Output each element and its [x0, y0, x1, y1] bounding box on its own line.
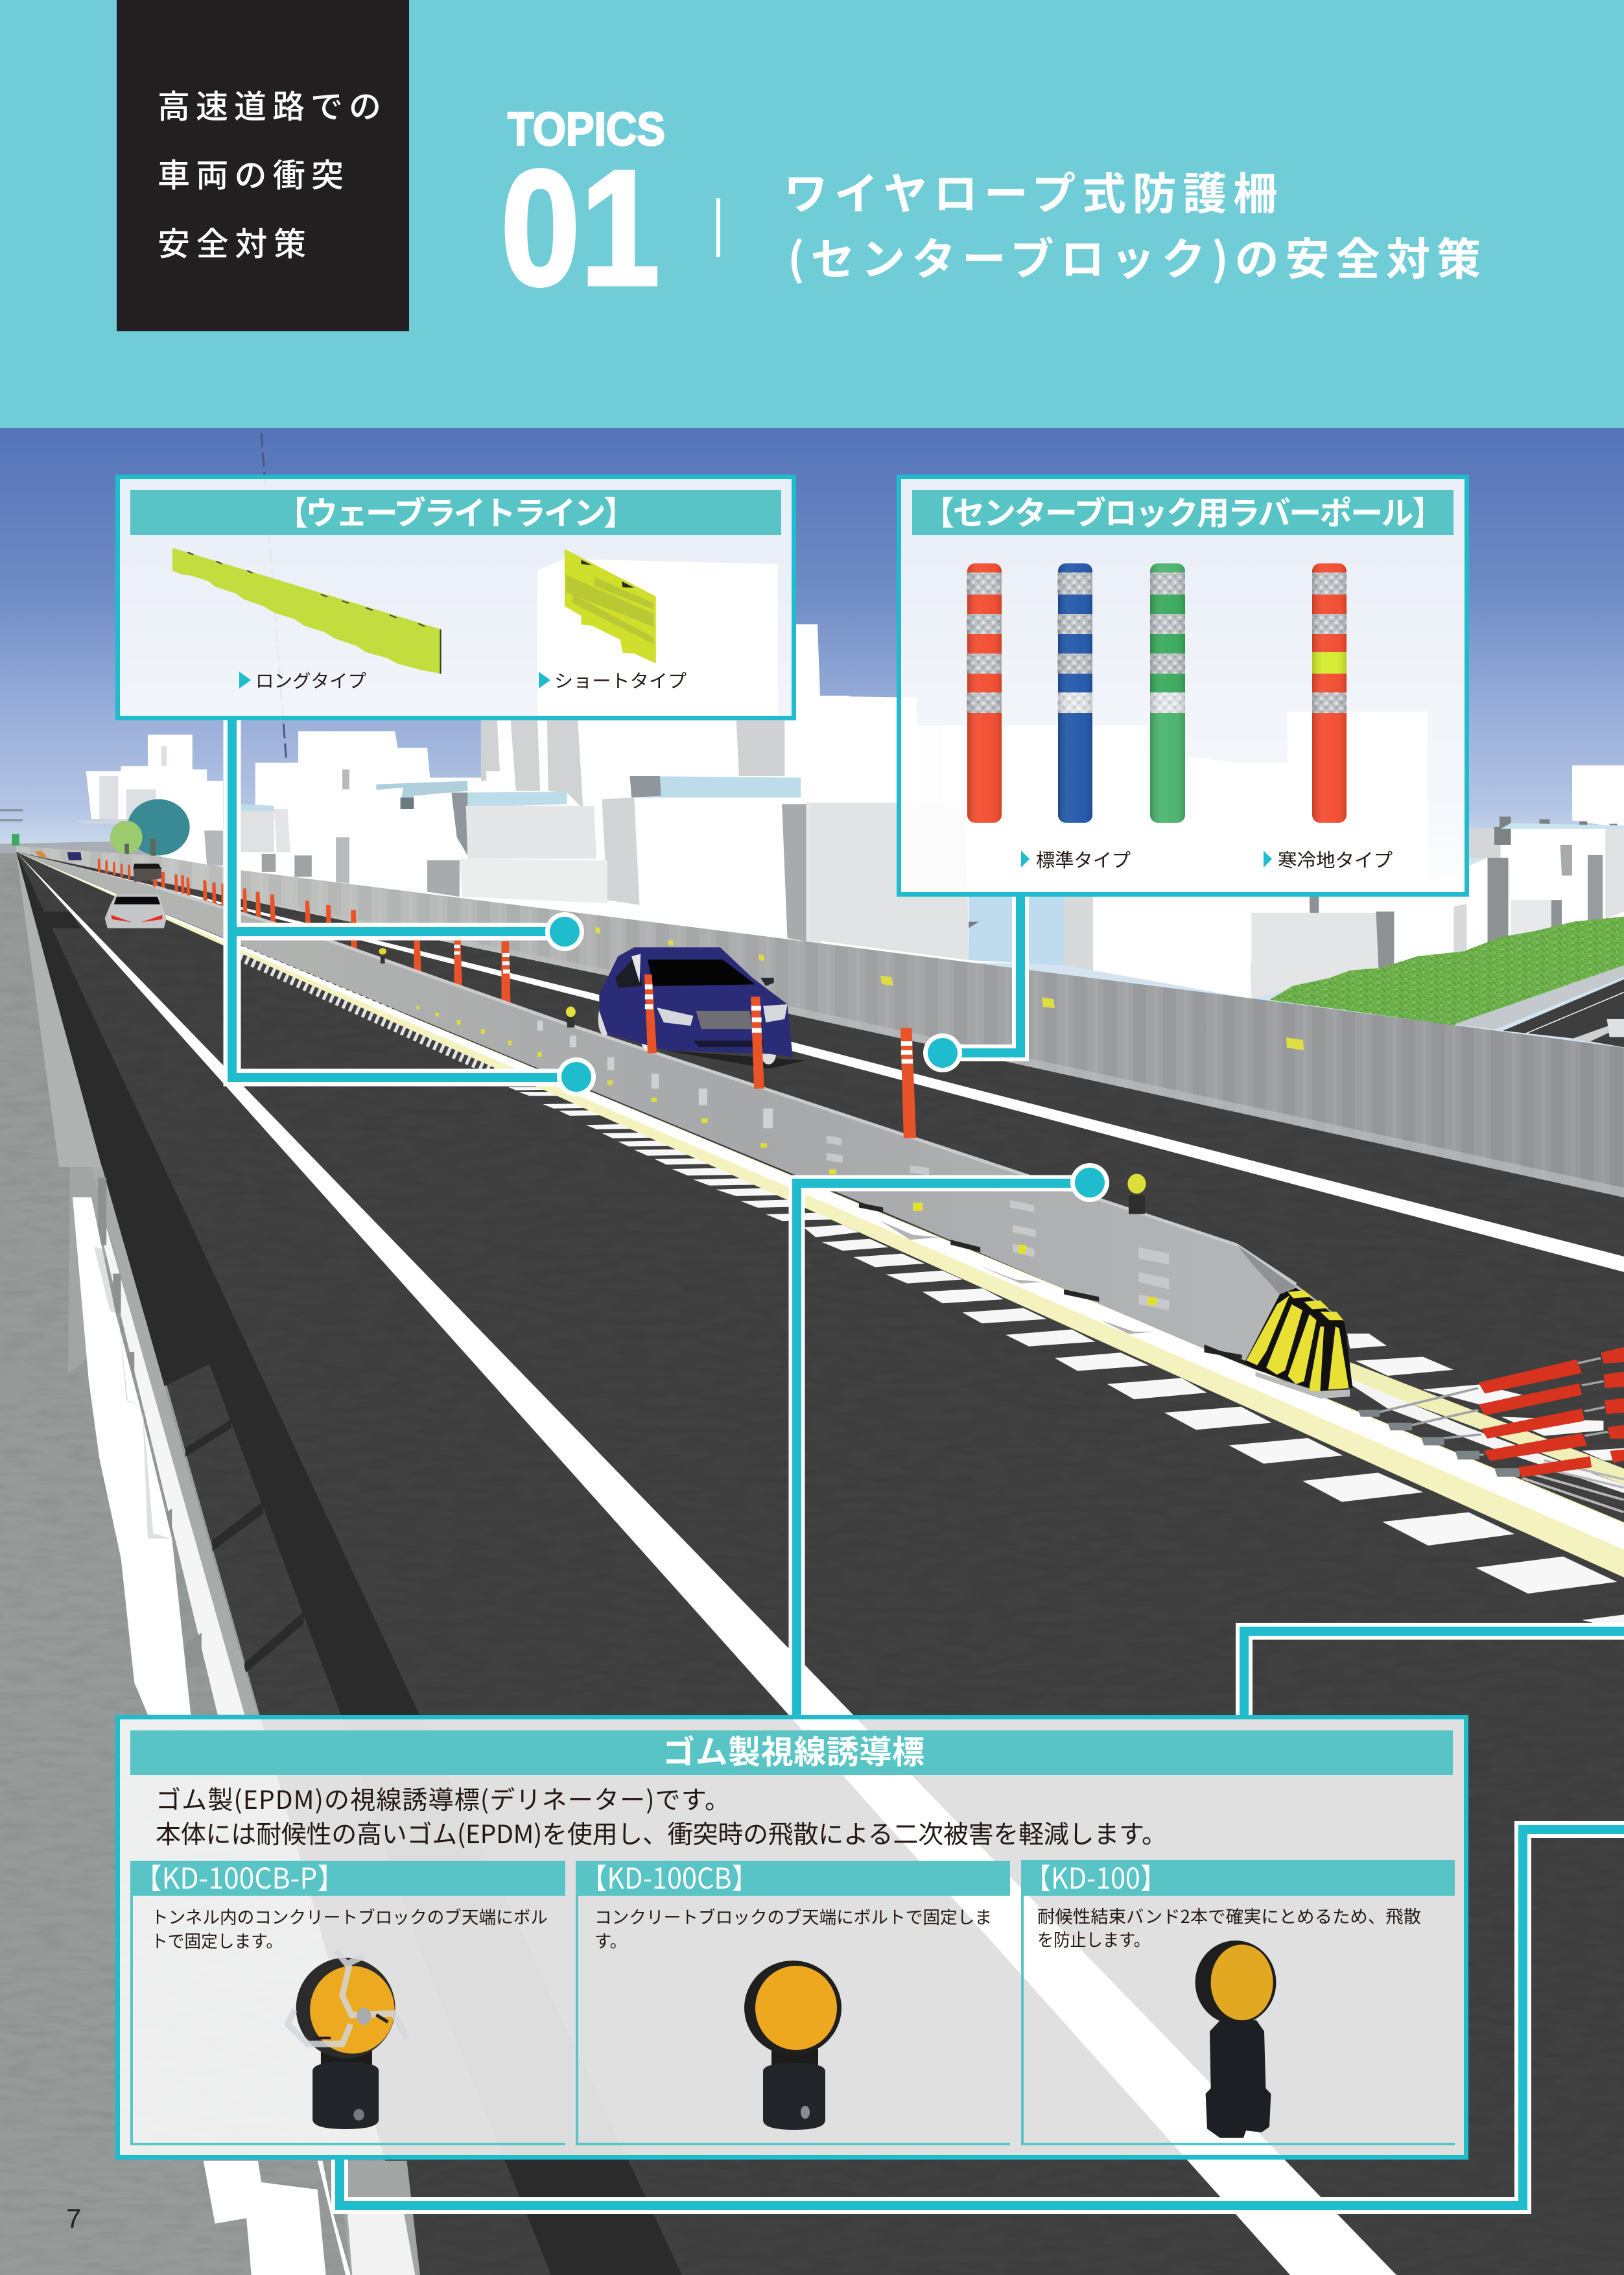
column: KD-100CB-P	[130, 1856, 565, 2144]
label: long type: ロングタイプ	[255, 667, 366, 693]
panel heading	[130, 1727, 1453, 1775]
connector: rubber pole to road	[923, 897, 1020, 1072]
car: silver hatchback	[67, 852, 167, 928]
connector: wave light line to barrier	[232, 720, 596, 1096]
column: KD-100	[1021, 1856, 1455, 2144]
topics number: TOPICS	[508, 104, 665, 156]
page number: 7	[66, 2203, 81, 2234]
reflector groups on barrier	[827, 1136, 1242, 1359]
hedge and side road	[1269, 917, 1624, 1047]
column: KD-100CB-P: トで固定します。	[151, 1927, 283, 1953]
product: long type panel	[172, 548, 441, 674]
section tag box: 安全対策	[158, 218, 306, 265]
header band	[0, 0, 1624, 428]
panel: rubber delineators	[118, 1717, 1466, 2158]
far poles behind barrier	[35, 851, 511, 1006]
column: KD-100CB	[576, 1856, 1010, 2144]
wire rope red cushions	[1358, 1347, 1624, 1478]
column: KD-100CB-P: トンネル内のコンクリートブロックのブ天端にボル	[151, 1904, 548, 1929]
barrier nose	[1205, 1245, 1352, 1398]
connector: bottom loop	[340, 1830, 1624, 2206]
asphalt road	[0, 843, 1624, 2275]
buildings	[0, 433, 1624, 998]
intro text: ゴム製(EPDM)の視線誘導標(デリネーター)です。	[156, 1780, 730, 1817]
connector: delineator to barrier	[797, 1163, 1109, 1715]
left ground	[0, 853, 385, 2275]
rubber pole: cold region type	[1312, 563, 1347, 823]
main title	[784, 158, 1481, 288]
roadside guardrail	[73, 1167, 420, 2275]
edge dashes	[242, 951, 1624, 1623]
panel heading	[130, 488, 781, 535]
intro text: 本体には耐候性の高いゴム(EPDM)を使用し、衝突時の飛散による二次被害を軽減します。	[156, 1815, 1167, 1851]
column: KD-100CB-P: 【KD-100CB-P】	[134, 1856, 345, 1897]
section tag box	[117, 0, 409, 331]
panel: wave light line	[118, 477, 794, 718]
connector: upper right exit	[1244, 1631, 1624, 1715]
rubber pole: green standard	[1150, 563, 1185, 823]
label: standard type: 標準タイプ	[1036, 845, 1131, 873]
column: KD-100CB: コンクリートブロックのブ天端にボルトで固定しま	[594, 1904, 992, 1929]
panel heading: 【センターブロック用ラバーポール】	[922, 488, 1444, 534]
center barrier	[16, 852, 1350, 1389]
lane lines	[16, 852, 1624, 2275]
topics number: 01	[500, 136, 660, 320]
panel heading: ゴム製視線誘導標	[663, 1727, 924, 1773]
section tag box: 高速道路での	[158, 81, 381, 128]
product: short type panel	[565, 549, 656, 663]
column: KD-100: を防止します。	[1037, 1926, 1150, 1951]
main title: ワイヤロープ式防護柵	[784, 158, 1277, 222]
far side wall	[16, 846, 1624, 1197]
label: short type: ショートタイプ	[554, 667, 687, 693]
median marking strips	[16, 852, 1624, 1577]
column: KD-100CB: す。	[594, 1927, 627, 1953]
main title: (センターブロック)の安全対策	[788, 224, 1481, 288]
rubber pole: blue standard	[1057, 563, 1092, 823]
column: KD-100: 【KD-100】	[1024, 1856, 1167, 1897]
column: KD-100: 耐候性結束バンド2本で確実にとめるため、飛散	[1037, 1903, 1421, 1928]
car: blue sedan	[598, 947, 806, 1068]
section tag box: 車両の衝突	[158, 150, 344, 196]
near orange poles	[379, 945, 1146, 1214]
rubber pole: red standard	[967, 563, 1002, 823]
label: cold region type: 寒冷地タイプ	[1278, 845, 1393, 873]
column: KD-100CB: 【KD-100CB】	[580, 1856, 759, 1897]
delineator with plastic clips	[288, 1951, 407, 2129]
panel: center block rubber poles	[899, 477, 1466, 895]
delineator with post	[1195, 1940, 1276, 2138]
intro text	[156, 1780, 1167, 1851]
panel heading: 【ウェーブライトライン】	[276, 488, 636, 534]
delineator round head	[744, 1961, 841, 2130]
